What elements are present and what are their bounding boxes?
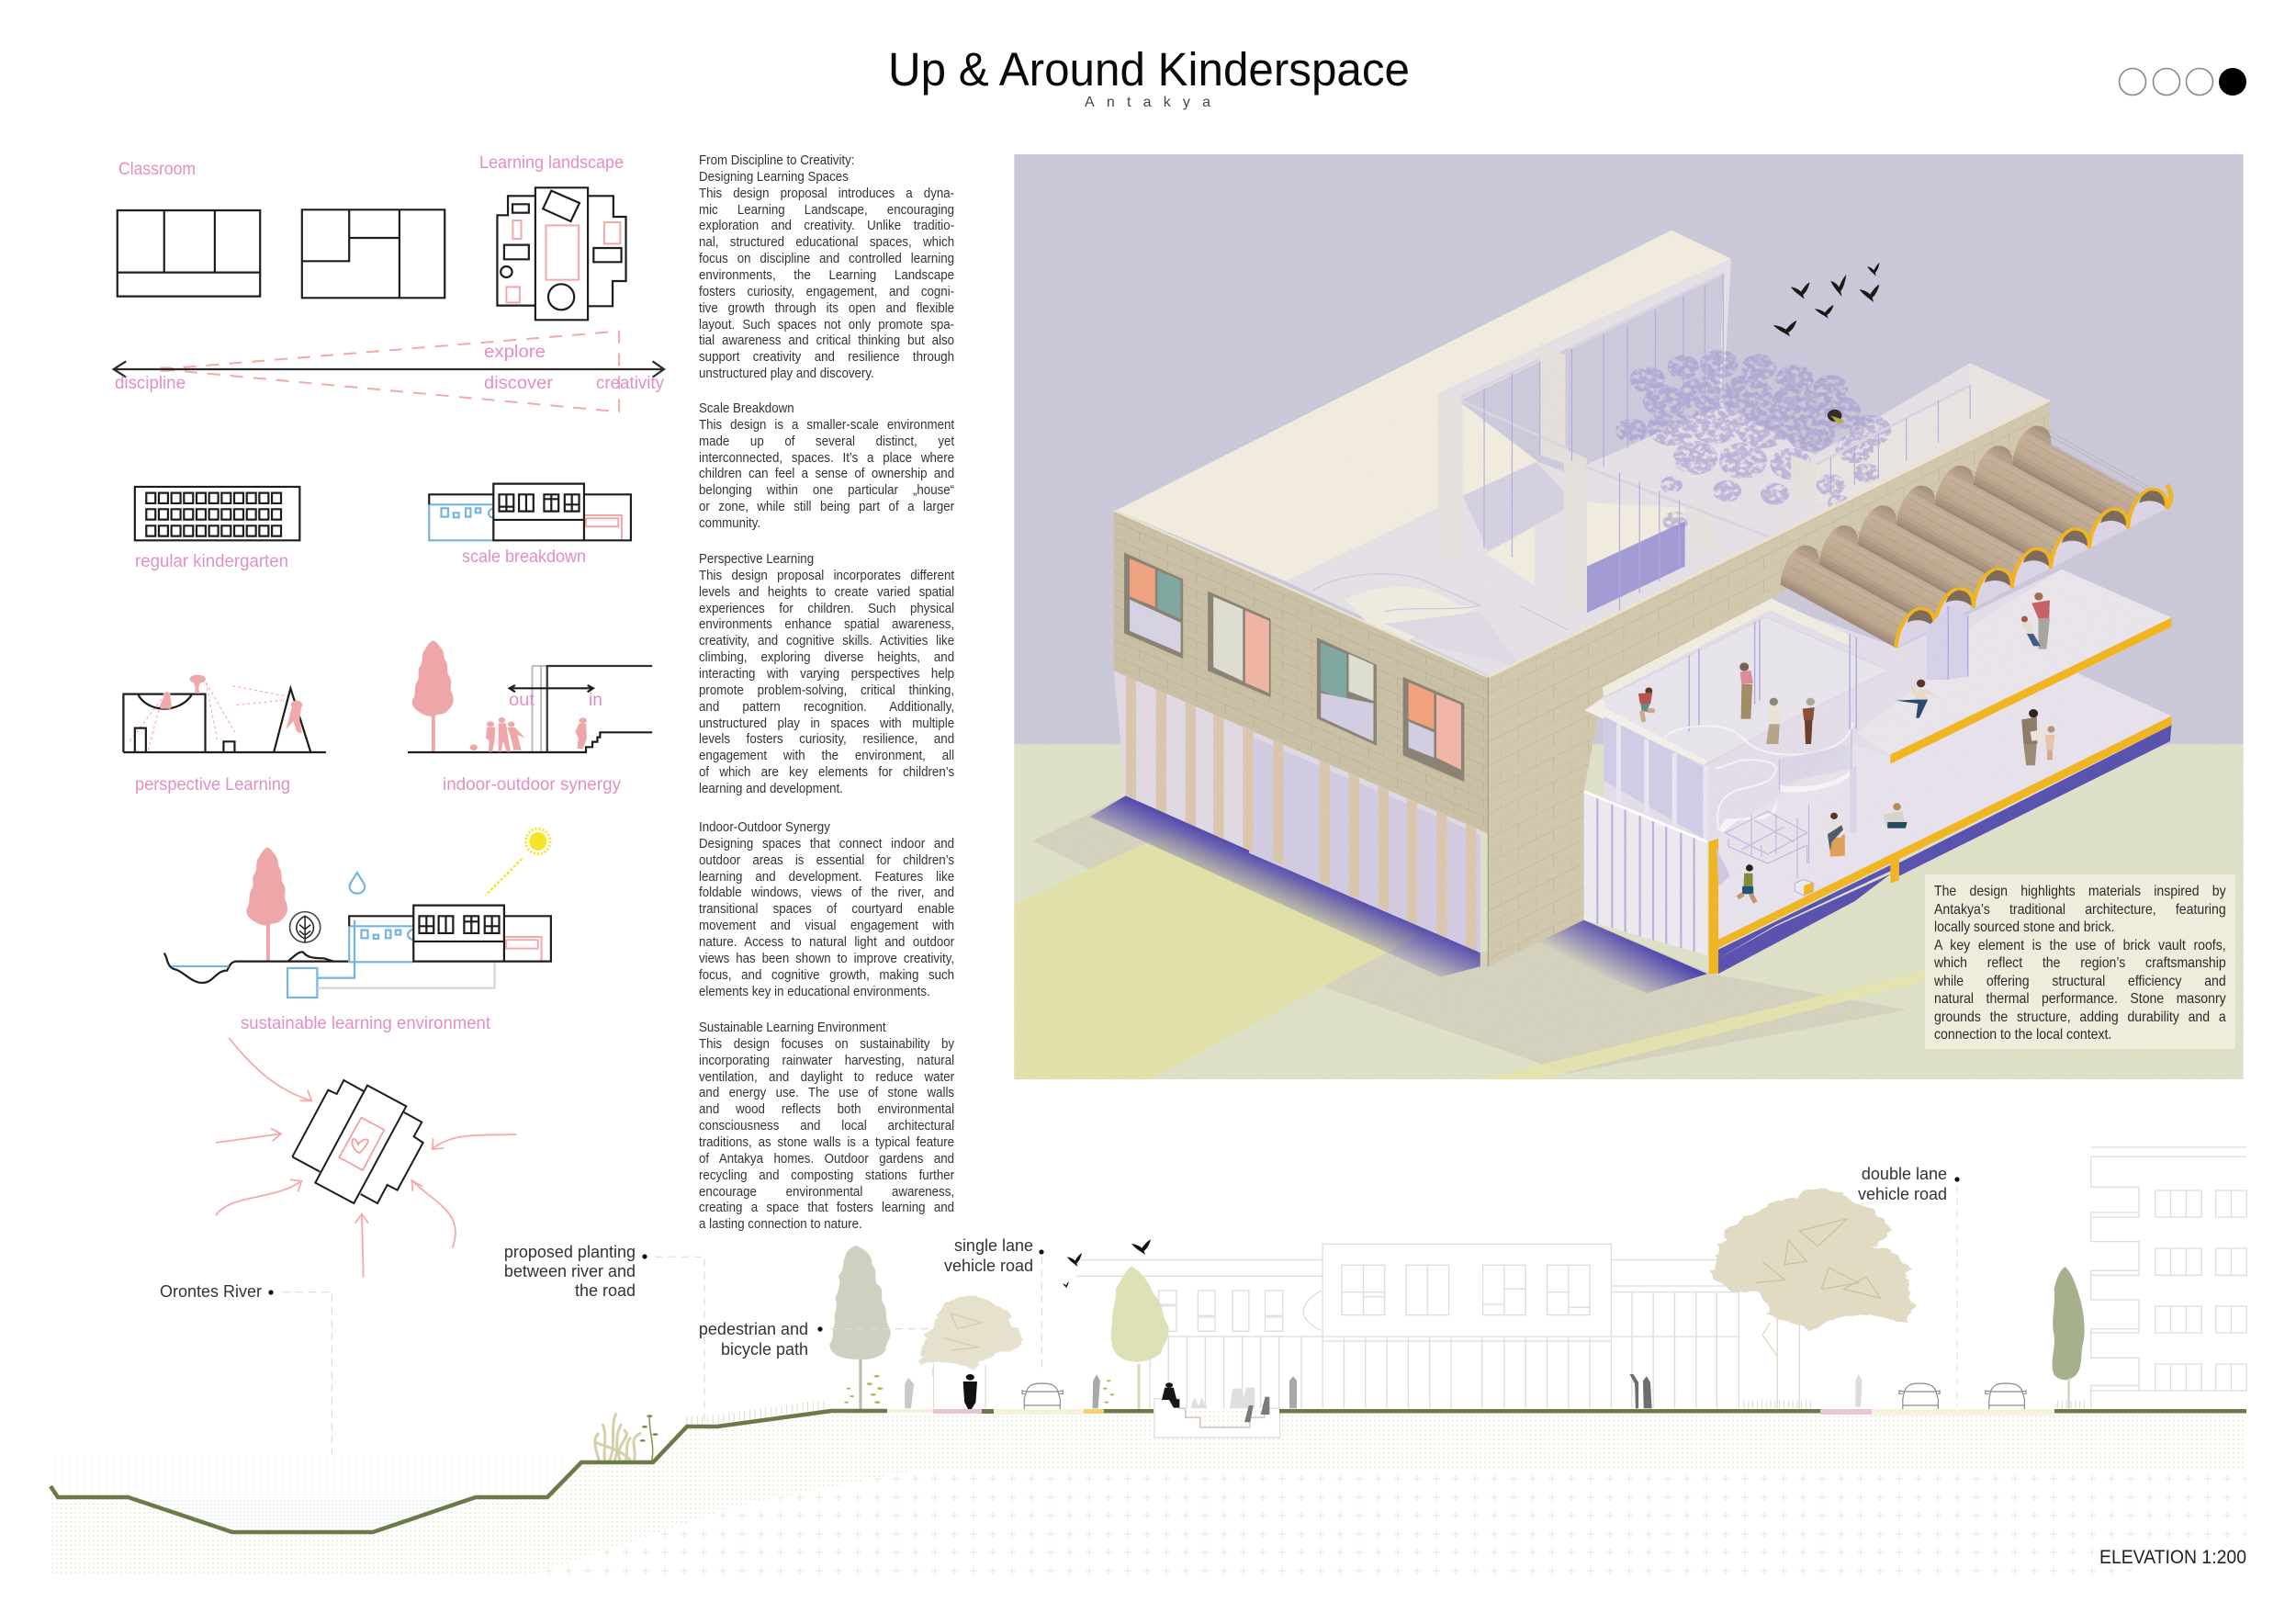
stone wall, left facade: [1114, 511, 1488, 834]
text block: from discipline to creativity: exploration and creativity. Unlike traditio-: [699, 219, 954, 233]
courtyard with glazed frames: [1286, 259, 2050, 677]
callout: materials note: Antakya’s traditional architecture, featuring: [1934, 902, 2226, 918]
small bird on rail: [1828, 410, 1843, 424]
leader lines: [283, 1257, 1041, 1454]
sunken seating steps: [1154, 1399, 1280, 1438]
text block: sustainable learning environment: incorporating rainwater harvesting, natural: [699, 1054, 954, 1068]
elevation ground hatching: [51, 1410, 2246, 1575]
pink diagram labels: creativity: [596, 374, 664, 393]
text block: from discipline to creativity: From Discipline to Creativity:: [699, 153, 854, 168]
text block: perspective learning: [699, 552, 954, 796]
text block: indoor-outdoor synergy: movement and visual engagement with: [699, 919, 954, 933]
text block: from discipline to creativity: fosters curiosity, engagement, and cogni-: [699, 285, 954, 299]
text block: perspective learning: of which are key elements for children’s: [699, 765, 954, 780]
olive tree: [1111, 1266, 1169, 1410]
callout: materials note: A key element is the use of brick vault roofs,: [1934, 938, 2226, 953]
text block: indoor-outdoor synergy: views has been shown to improve creativity,: [699, 952, 954, 966]
text block: scale breakdown: This design is a smaller-scale environment: [699, 418, 954, 433]
text block: sustainable learning environment: creating a space that fosters learning and: [699, 1201, 954, 1215]
sky and ground: [1014, 154, 2244, 1079]
car on single lane road: [1022, 1383, 1063, 1410]
sustainable learning environment section: [164, 829, 551, 998]
elevation labels: pedestrian and: [699, 1320, 808, 1338]
brick vault roofs: [1781, 426, 2171, 648]
shelving: [1725, 806, 1809, 879]
pink diagram labels: regular kindergarten: [135, 552, 288, 571]
elevation labels: vehicle road: [1858, 1185, 1947, 1203]
text block: indoor-outdoor synergy: outdoor areas is essential for children’s: [699, 853, 954, 868]
regular kindergarten plan: [135, 487, 299, 540]
text block: perspective learning: promote problem-solving, critical thinking,: [699, 683, 954, 698]
pink diagram labels: sustainable learning environment: [241, 1014, 491, 1033]
callout: materials note: The design highlights materials inspired by: [1934, 884, 2226, 899]
text block: scale breakdown: [699, 401, 954, 531]
text block: perspective learning: and pattern recognition. Additionally,: [699, 700, 954, 715]
callout: materials note: [1934, 884, 2226, 1043]
elevation labels: between river and: [504, 1262, 636, 1280]
text block: sustainable learning environment: Sustainable Learning Environment: [699, 1021, 886, 1035]
courtyard tree: [1615, 350, 1891, 531]
perspective learning section: [123, 675, 326, 752]
text block: from discipline to creativity: Designing Learning Spaces: [699, 170, 849, 185]
pink diagram labels: perspective Learning: [135, 775, 290, 795]
spiral stair: [1664, 723, 1856, 886]
text block: sustainable learning environment: This design focuses on sustainability by: [699, 1037, 954, 1052]
text block: sustainable learning environment: [699, 1021, 954, 1232]
text block: sustainable learning environment: consciousness and local architectural: [699, 1119, 954, 1133]
grass: [1744, 1400, 2085, 1408]
interior details and people: [1584, 592, 2054, 955]
pink diagram labels: out: [509, 691, 535, 710]
classroom plans: [118, 209, 445, 298]
text block: perspective learning: interacting with varying perspectives help: [699, 667, 954, 682]
elevation labels: bicycle path: [721, 1340, 808, 1359]
callout: materials note: while offering structural efficiency and: [1934, 974, 2226, 989]
small crate: [1795, 879, 1814, 896]
text block: from discipline to creativity: support creativity and resilience through: [699, 350, 954, 365]
bird above school: [1131, 1239, 1151, 1255]
stone wall, right facade: [1488, 400, 2050, 966]
callout: materials note: which reflect the region’s craftsmanship: [1934, 955, 2226, 971]
pink diagram labels: [115, 153, 664, 1033]
text block: perspective learning: learning and development.: [699, 782, 843, 796]
text block: sustainable learning environment: and energy use. The use of stone walls: [699, 1086, 954, 1100]
big beige tree: [1711, 1187, 1914, 1408]
text block: scale breakdown: children can feel a sense of ownership and: [699, 467, 954, 481]
roof slab: [1116, 231, 1731, 581]
text block: from discipline to creativity: focus on discipline and controlled learning: [699, 252, 954, 266]
elevation labels: the road: [575, 1281, 636, 1300]
text block: sustainable learning environment: encourage environmental awareness,: [699, 1185, 954, 1200]
pink diagram labels: in: [589, 691, 602, 710]
orange seat box: [1830, 834, 1845, 857]
glazed lower volume: [1604, 716, 1707, 840]
discipline to creativity axis: [114, 332, 664, 412]
text block: scale breakdown: community.: [699, 516, 760, 531]
title: Antakya: [1085, 95, 1210, 110]
text block: perspective learning: levels fosters curiosity, resilience, and: [699, 732, 954, 747]
text block: perspective learning: creativity, and cognitive skills. Activities like: [699, 634, 954, 648]
text block: from discipline to creativity: tive growth through its open and flexible: [699, 301, 954, 316]
birds in elevation: [1063, 1253, 1082, 1289]
cars: [1899, 1383, 2026, 1410]
riverside planting: [595, 1400, 824, 1460]
callout: materials note: grounds the structure, adding durability and a: [1934, 1009, 2226, 1025]
text block: indoor-outdoor synergy: Designing spaces that connect indoor and: [699, 837, 954, 851]
elevation labels: double lane: [1862, 1165, 1947, 1183]
pink diagram labels: discover: [484, 374, 554, 393]
title: Up & Around Kinderspace: [888, 43, 1410, 96]
school elevation: [1076, 1244, 1814, 1410]
roadside shrubs: [844, 1375, 1114, 1404]
text block: perspective learning: levels and heights to create varied spatial: [699, 585, 954, 600]
indoor-outdoor synergy section: [408, 640, 652, 752]
elevation labels: vehicle road: [944, 1257, 1033, 1275]
atrium ceiling beams: [1584, 599, 1968, 765]
text block: scale breakdown: Scale Breakdown: [699, 401, 794, 416]
text block: indoor-outdoor synergy: foldable windows, views of the river, and: [699, 885, 954, 900]
text block: from discipline to creativity: layout. Such spaces not only promote spa-: [699, 318, 954, 333]
people and cyclist: [905, 1374, 1100, 1409]
pink diagram labels: Classroom: [118, 160, 196, 179]
pink diagram labels: Learning landscape: [479, 153, 624, 173]
children and adults: [1638, 592, 2054, 903]
scale breakdown elevation: [429, 484, 631, 540]
facade windows: [1124, 553, 1464, 782]
elevation buildings: [1076, 1147, 2246, 1438]
callout: materials note: connection to the local context.: [1934, 1027, 2111, 1043]
paper grain over illustration: [1014, 154, 2244, 1079]
pink diagram labels: discipline: [115, 374, 186, 393]
text block: perspective learning: This design proposal incorporates different: [699, 569, 954, 583]
grey-green tree: [829, 1246, 891, 1410]
text block: scale breakdown: belonging within one particular „house“: [699, 483, 954, 498]
materials note background: [1925, 874, 2235, 1049]
text block: indoor-outdoor synergy: Indoor-Outdoor Synergy: [699, 820, 830, 835]
text block: from discipline to creativity: tial awareness and critical thinking but also: [699, 333, 954, 348]
callout: materials note: natural thermal performance. Stone masonry: [1934, 991, 2226, 1007]
apartment block: [2091, 1147, 2246, 1408]
text block: perspective learning: experiences for children. Such physical: [699, 602, 954, 616]
text block: from discipline to creativity: [699, 153, 954, 381]
elevation labels: Orontes River: [160, 1282, 262, 1301]
text block: sustainable learning environment: and wood reflects both environmental: [699, 1102, 954, 1117]
isometric illustration panel: [1014, 154, 2244, 1079]
callout: materials note: locally sourced stone and brick.: [1934, 919, 2114, 935]
text block: from discipline to creativity: nal, structured educational spaces, which: [699, 235, 954, 250]
elevation labels: single lane: [954, 1236, 1033, 1255]
text block: from discipline to creativity: mic Learning Landscape, encouraging: [699, 203, 954, 218]
elevation people: [1162, 1374, 1863, 1422]
text block: sustainable learning environment: ventilation, and daylight to reduce water: [699, 1070, 954, 1085]
ground-floor colonnade: [1114, 671, 1480, 953]
text block: indoor-outdoor synergy: nature. Access to natural light and outdoor: [699, 935, 954, 950]
ground shadows and sun patches: [1014, 795, 1925, 1079]
yellow cut slabs: [1709, 617, 2172, 974]
glass frames: [1438, 274, 1970, 613]
site plan with inward arrows: [216, 1038, 517, 1278]
text block: indoor-outdoor synergy: focus, and cognitive growth, making such: [699, 968, 954, 983]
scale caption: ELEVATION 1:200: [2099, 1547, 2246, 1568]
text block: sustainable learning environment: recycling and composting stations further: [699, 1168, 954, 1183]
text block: from discipline to creativity: unstructured play and discovery.: [699, 367, 874, 381]
text block: indoor-outdoor synergy: elements key in educational environments.: [699, 985, 930, 999]
elevation labels: proposed planting: [504, 1243, 636, 1261]
elevation ground line: [51, 1409, 2246, 1532]
pink diagram labels: scale breakdown: [462, 547, 586, 567]
cut-away interior: [1604, 570, 2172, 943]
elevation trees, plants and people, river side: [283, 1246, 1169, 1460]
slim green tree: [2053, 1267, 2085, 1408]
text block: from discipline to creativity: This design proposal introduces a dyna-: [699, 186, 954, 201]
text block: indoor-outdoor synergy: transitional spaces of courtyard enable: [699, 902, 954, 917]
fin panel: [1584, 792, 1707, 955]
text block: perspective learning: engagement with the environment, all: [699, 749, 954, 763]
text block: sustainable learning environment: traditions, as stone walls is a typical feature: [699, 1135, 954, 1150]
diagrams: classroom to learning landscape: [114, 187, 664, 540]
beige tree: [921, 1295, 1023, 1408]
text block: perspective learning: Perspective Learning: [699, 552, 814, 567]
text block: sustainable learning environment: a lasting connection to nature.: [699, 1217, 862, 1232]
pink diagram labels: indoor-outdoor synergy: [443, 775, 621, 795]
text block: perspective learning: unstructured play in spaces with multiple: [699, 716, 954, 731]
elevation labels: [160, 1165, 1960, 1405]
text block: scale breakdown: made up of several distinct, yet: [699, 434, 954, 449]
text block: from discipline to creativity: environments, the Learning Landscape: [699, 268, 954, 283]
text block: perspective learning: climbing, exploring diverse heights, and: [699, 650, 954, 665]
text block: perspective learning: environments enhance spatial awareness,: [699, 617, 954, 632]
page progress dots: [2120, 68, 2246, 96]
text block: sustainable learning environment: of Antakya homes. Outdoor gardens and: [699, 1152, 954, 1167]
pink diagram labels: explore: [484, 343, 546, 362]
text block: scale breakdown: interconnected, spaces. It’s a place where: [699, 451, 954, 466]
text block: indoor-outdoor synergy: [699, 820, 954, 999]
birds: [1773, 263, 1880, 336]
text block: indoor-outdoor synergy: learning and development. Features like: [699, 870, 954, 885]
purple void under floor: [1718, 725, 2172, 974]
text block: scale breakdown: or zone, while still being part of a larger: [699, 500, 954, 514]
learning landscape plan: [497, 187, 626, 320]
diagrams: perspective, synergy and sustainability: [123, 640, 652, 998]
